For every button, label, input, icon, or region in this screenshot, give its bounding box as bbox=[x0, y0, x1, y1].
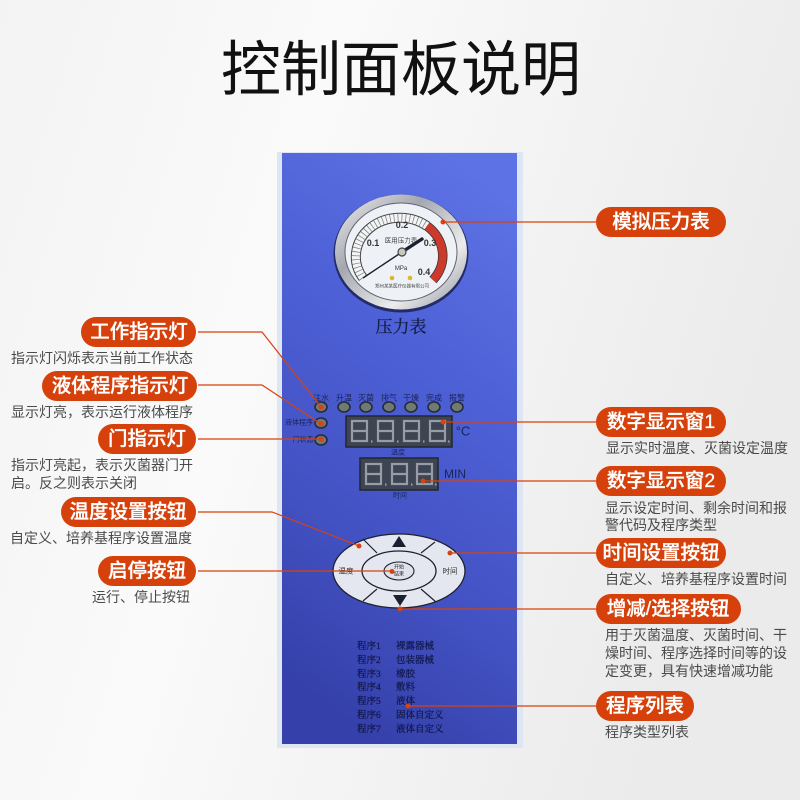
callout: increase decrease select button: 燥时间、程序选择时间等的设 bbox=[605, 645, 787, 661]
title: 控制面板说明 bbox=[221, 36, 581, 104]
program list: 包装器械 bbox=[396, 654, 435, 666]
program list bbox=[357, 640, 444, 735]
indicator lights: 排气 bbox=[381, 392, 397, 402]
program list: 程序2 bbox=[357, 654, 381, 666]
callout: program list: 程序类型列表 bbox=[605, 724, 689, 740]
callout: digital display 1 bbox=[440, 407, 788, 456]
callout: work indicator bbox=[11, 317, 324, 410]
program list: 程序6 bbox=[357, 709, 381, 721]
program list: 程序3 bbox=[357, 668, 381, 680]
digital display 2 bbox=[360, 458, 466, 500]
pressure gauge: 0.2 bbox=[396, 220, 408, 230]
callout: start stop button bbox=[92, 556, 394, 605]
callout: door indicator bbox=[11, 424, 324, 491]
callout: work indicator: 工作指示灯 bbox=[90, 321, 188, 343]
callout: door indicator: 启。反之则表示关闭 bbox=[11, 475, 137, 491]
callout: program list bbox=[406, 691, 694, 740]
callout: temperature button bbox=[10, 497, 362, 548]
pressure gauge: 郑州某某医疗仪器有限公司 bbox=[375, 282, 429, 290]
program list: 裸露器械 bbox=[396, 640, 435, 652]
callout: digital display 1: 显示实时温度、灭菌设定温度 bbox=[606, 440, 788, 456]
callout: work indicator: 指示灯闪烁表示当前工作状态 bbox=[11, 350, 193, 366]
indicator lights: 液体程序 bbox=[285, 418, 313, 426]
oval button pad: 结束 bbox=[394, 570, 404, 578]
callout: digital display 1: 数字显示窗1 bbox=[607, 411, 715, 433]
indicator lights: 门状态 bbox=[292, 434, 314, 444]
digital display 1 bbox=[346, 416, 470, 456]
program list: 程序4 bbox=[357, 681, 381, 693]
callout: increase decrease select button: 增减/选择按钮 bbox=[607, 598, 729, 620]
callout: time button: 自定义、培养基程序设置时间 bbox=[605, 571, 787, 587]
program list: 液体 bbox=[396, 695, 416, 707]
callout: liquid program indicator: 显示灯亮，表示运行液体程序 bbox=[11, 404, 193, 420]
callout: temperature button: 温度设置按钮 bbox=[69, 501, 187, 523]
callout: digital display 2: 显示设定时间、剩余时间和报 bbox=[605, 500, 787, 516]
callout: digital display 2: 数字显示窗2 bbox=[607, 470, 715, 492]
digital display 1: °C bbox=[456, 424, 470, 438]
pressure gauge: 0.3 bbox=[424, 238, 436, 248]
program list: 程序1 bbox=[357, 640, 381, 652]
panel: control panel bbox=[277, 152, 523, 748]
callout: start stop button: 启停按钮 bbox=[108, 560, 186, 582]
callout: start stop button: 运行、停止按钮 bbox=[92, 589, 190, 605]
program list: 液体自定义 bbox=[396, 723, 444, 735]
callout: liquid program indicator bbox=[11, 371, 324, 426]
program list: 固体自定义 bbox=[396, 709, 444, 721]
oval button pad bbox=[333, 534, 465, 608]
pressure gauge: 医用压力表 bbox=[385, 236, 418, 244]
callout: door indicator: 门指示灯 bbox=[108, 428, 186, 450]
callout: analog pressure gauge bbox=[440, 207, 726, 237]
callout: digital display 2 bbox=[420, 466, 787, 533]
callout: time button bbox=[448, 538, 787, 587]
pressure gauge bbox=[334, 194, 468, 312]
oval button pad: 时间 bbox=[442, 566, 458, 576]
callout: increase decrease select button: 用于灭菌温度、灭菌时间、干 bbox=[605, 627, 787, 643]
program list: 程序7 bbox=[357, 723, 381, 735]
indicator lights: 灭菌 bbox=[358, 392, 374, 402]
callout: increase decrease select button bbox=[398, 594, 787, 679]
digital display 2: 时间 bbox=[393, 490, 407, 500]
callout: liquid program indicator: 液体程序指示灯 bbox=[52, 375, 188, 397]
callout: program list: 程序列表 bbox=[606, 695, 684, 717]
callout: temperature button: 自定义、培养基程序设置温度 bbox=[10, 530, 192, 546]
program list: 敷料 bbox=[396, 681, 416, 693]
digital display 1: 温度 bbox=[391, 448, 405, 456]
indicator lights: 报警 bbox=[449, 392, 465, 402]
indicator lights: 完成 bbox=[426, 392, 442, 402]
callout: increase decrease select button: 定变更，具有快速增减功能 bbox=[605, 663, 773, 679]
oval button pad: 温度 bbox=[338, 566, 354, 576]
program list: 橡胶 bbox=[396, 668, 416, 680]
pressure gauge: 0.4 bbox=[418, 267, 430, 277]
callout: door indicator: 指示灯亮起，表示灭菌器门开 bbox=[11, 457, 193, 473]
callout: analog pressure gauge: 模拟压力表 bbox=[612, 211, 710, 233]
indicator lights: 干燥 bbox=[403, 394, 419, 402]
indicator lights: 升温 bbox=[336, 394, 352, 402]
program list: 程序5 bbox=[357, 695, 381, 707]
gauge caption: 压力表 bbox=[376, 318, 426, 336]
pressure gauge: 0.1 bbox=[367, 238, 379, 248]
digital display 2: MIN bbox=[444, 467, 466, 481]
oval button pad: 开始 bbox=[394, 564, 404, 570]
indicator lights bbox=[285, 392, 465, 445]
callout: digital display 2: 警代码及程序类型 bbox=[605, 517, 717, 533]
pressure gauge: MPa bbox=[395, 266, 408, 272]
indicator lights: 注水 bbox=[313, 392, 329, 402]
callout: time button: 时间设置按钮 bbox=[602, 542, 720, 564]
